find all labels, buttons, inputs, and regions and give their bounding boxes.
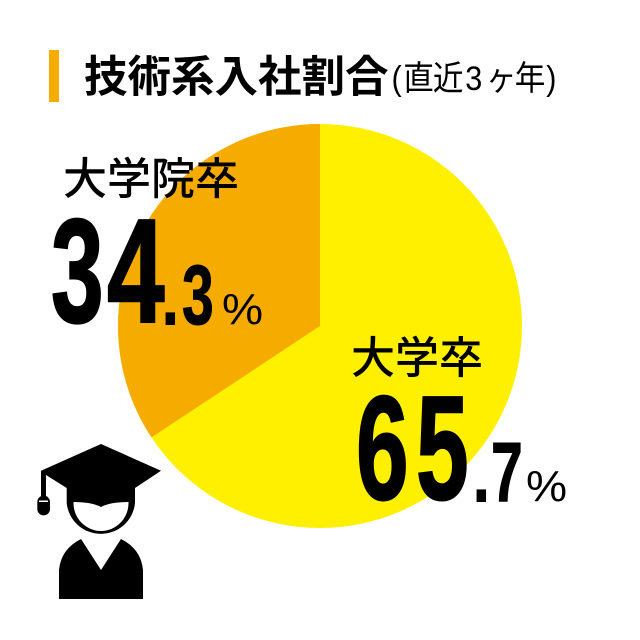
subtitle: 近 [433, 60, 463, 97]
value: 65.7%: . [472, 427, 491, 521]
label: university: 大学卒 [351, 334, 483, 383]
label: graduate school: 大学院卒 [63, 155, 239, 204]
icon: graduate [37, 444, 161, 599]
pie chart [118, 124, 522, 528]
value: 34.3%: 4 [107, 189, 165, 354]
value: 34.3%: % [222, 284, 263, 334]
subtitle: 直 [403, 60, 434, 97]
value: 65.7%: 6 [356, 367, 409, 531]
value: 65.7% [356, 367, 567, 531]
subtitle: ) [546, 60, 556, 97]
value: 34.3%: 3 [51, 190, 104, 354]
subtitle: 3 [465, 60, 482, 97]
value: 65.7%: 7 [491, 426, 523, 520]
title accent bar [49, 50, 59, 102]
title: 技術系入社割合 [84, 54, 388, 102]
subtitle: 年 [515, 60, 545, 97]
subtitle: ( [392, 60, 402, 97]
value: 34.3%: 3 [182, 249, 214, 343]
value: 34.3%: . [161, 250, 180, 344]
subtitle: ヶ [486, 60, 517, 97]
value: 34.3% [51, 189, 263, 354]
value: 65.7%: % [526, 461, 567, 511]
value: 65.7%: 5 [416, 367, 469, 531]
